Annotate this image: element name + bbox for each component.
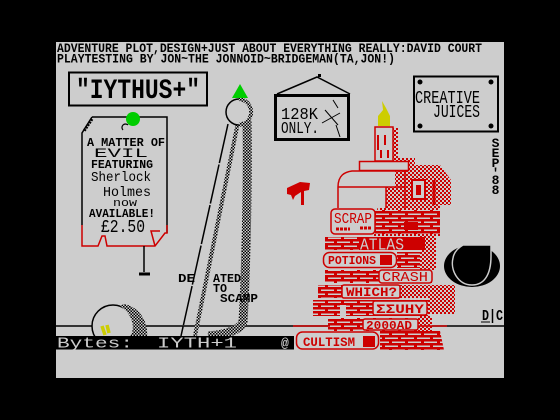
poster: a matter of evil: AVAILABLE!	[89, 207, 155, 221]
book: 2000ad: 2000AD	[366, 319, 412, 333]
book: which: WHICH?	[346, 285, 397, 300]
poster: a matter of evil: A MATTER OF	[87, 136, 165, 150]
blood splat	[287, 182, 310, 205]
pole and ball	[181, 84, 252, 336]
screen background	[56, 42, 504, 378]
date text: '	[492, 166, 499, 181]
poster: a matter of evil: EVIL	[94, 146, 148, 161]
sign: creative juices: CREATIVE	[415, 89, 480, 109]
dedication text	[178, 272, 258, 306]
bytes status bar	[56, 336, 294, 352]
poster: a matter of evil: Holmes	[103, 185, 151, 201]
credits heading: ADVENTURE PLOT,DESIGN+JUST ABOUT EVERYTHING REALLY:DAVID COURT	[57, 41, 482, 56]
picture frame: 128K only: 128K	[281, 106, 319, 125]
DC signature: D|C	[482, 308, 503, 325]
book: cultism: CULTISM	[303, 335, 355, 350]
bytes status bar: @	[281, 336, 289, 351]
poster: a matter of evil: Sherlock	[91, 170, 151, 186]
date text: S	[492, 136, 500, 151]
credits heading	[57, 41, 482, 66]
book: potions: POTIONS	[328, 254, 376, 268]
icon: green flask top	[232, 84, 248, 98]
date text: 8	[492, 173, 500, 188]
date text: E	[492, 146, 500, 161]
date text: P	[492, 156, 500, 171]
stack of books	[293, 209, 455, 350]
black cauldron	[444, 245, 500, 287]
poster: a matter of evil: £2.50	[101, 218, 145, 238]
book: atlas: ATLAS	[360, 236, 404, 256]
credits heading: PLAYTESTING BY JON~THE JONNOID~BRIDGEMAN(TA,JON!)	[57, 52, 395, 66]
book: greek title	[373, 301, 427, 317]
book: scrap	[331, 209, 375, 234]
poster: a matter of evil	[82, 112, 167, 274]
book: cultism	[296, 332, 378, 350]
dedication text: DE	[178, 272, 195, 286]
poster: a matter of evil: FEATURING	[91, 158, 153, 172]
title box: "IYTHUS+"	[76, 76, 200, 107]
ground line	[56, 325, 504, 327]
bytes status bar: Bytes:	[57, 336, 133, 352]
ball at lower left	[92, 304, 147, 347]
sign: creative juices: JUICES	[433, 103, 480, 123]
poster: a matter of evil: now	[113, 198, 137, 210]
book: potions	[324, 252, 396, 268]
dedication text: ATED	[213, 272, 241, 286]
bytes status bar: IYTH+1	[157, 336, 237, 352]
icon: green pin	[122, 112, 140, 130]
candle and inkwell	[338, 101, 451, 236]
book: scrap: SCRAP	[334, 211, 372, 228]
book: crash: CRASH	[382, 270, 428, 286]
sign: creative juices	[414, 76, 498, 132]
date text	[492, 136, 500, 198]
book: greek title: ΣΣUHY	[376, 302, 424, 317]
dedication text: TO	[213, 282, 227, 296]
dedication text: SCAMP	[220, 292, 258, 306]
icon: candle flame	[378, 101, 390, 126]
date text: 8	[492, 183, 500, 198]
picture frame: 128K only: ONLY.	[281, 120, 319, 139]
picture frame: 128K only	[276, 74, 350, 140]
